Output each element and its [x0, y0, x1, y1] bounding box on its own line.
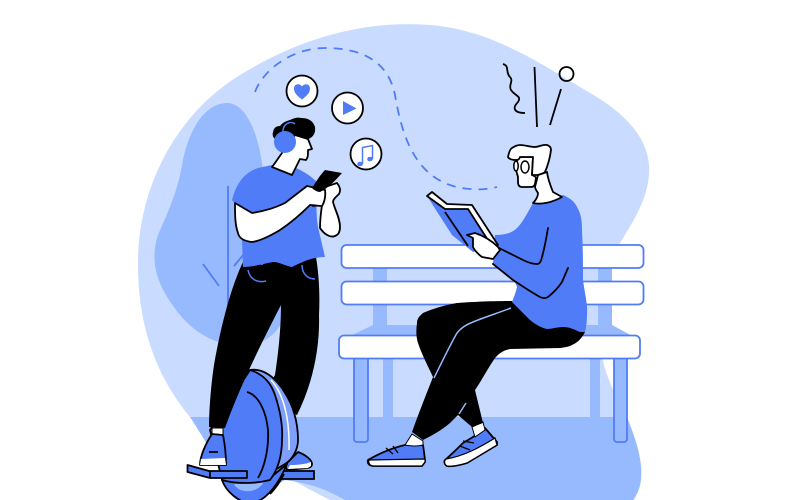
book spine: [445, 212, 468, 246]
wheel lower rim: [222, 464, 287, 500]
dashed path: [255, 48, 497, 189]
front leg: [209, 262, 300, 428]
rear sock: [472, 422, 485, 437]
bench seat shadow: [346, 325, 636, 338]
front shoe: [368, 444, 425, 466]
tree: [154, 103, 286, 350]
back leg: [260, 257, 319, 415]
bench rear legs: [383, 358, 600, 418]
right shoe: [285, 452, 312, 470]
neck: [533, 172, 562, 204]
left sock: [212, 428, 223, 436]
phone: [312, 170, 342, 192]
right arm: [235, 186, 325, 242]
standing man: [188, 118, 342, 500]
left shoe sole: [200, 458, 226, 465]
hand: [467, 233, 500, 259]
neck and face: [272, 135, 312, 175]
ground: [190, 417, 641, 500]
right shoe sole: [288, 462, 311, 469]
front sock: [405, 434, 423, 446]
bench seat plank: [339, 336, 640, 358]
bench: [339, 245, 644, 442]
left shoe: [200, 434, 226, 465]
wheel front disc: [210, 370, 282, 483]
icon: play bubble: [332, 92, 363, 124]
wheel outer band: [250, 370, 298, 470]
left pedal: [188, 465, 247, 478]
right pedal: [280, 471, 314, 479]
hair: [508, 145, 551, 175]
background blob: [138, 24, 649, 500]
icon: heart bubble: [286, 76, 318, 106]
wheel hub shadow: [234, 482, 264, 491]
trouser seam: [434, 308, 511, 414]
pockets: [248, 265, 315, 282]
bench front legs: [354, 355, 368, 442]
arm fold lines: [493, 228, 568, 298]
book: [427, 192, 498, 252]
rear shoe: [444, 428, 497, 466]
t-shirt: [232, 165, 325, 267]
icon: music note bubble: [350, 138, 382, 170]
unicycle wheel: [210, 370, 298, 500]
book pages: [427, 192, 498, 248]
bench back supports: [373, 262, 612, 325]
front shoe sole: [369, 459, 425, 466]
sweater: [493, 195, 587, 332]
bench middle plank: [342, 282, 644, 304]
book cover: [427, 196, 495, 252]
face: [516, 157, 536, 187]
wheel highlight: [271, 380, 289, 450]
seated man: [368, 64, 587, 466]
trousers: [412, 300, 585, 440]
hair: [273, 118, 315, 140]
thought lines: [503, 64, 574, 127]
bench top plank: [342, 245, 644, 268]
left forearm and hands: [313, 183, 340, 237]
wheel inner curve: [247, 392, 268, 478]
headphones: [274, 122, 296, 153]
rear shoe sole: [445, 438, 497, 466]
glasses: [514, 161, 529, 173]
